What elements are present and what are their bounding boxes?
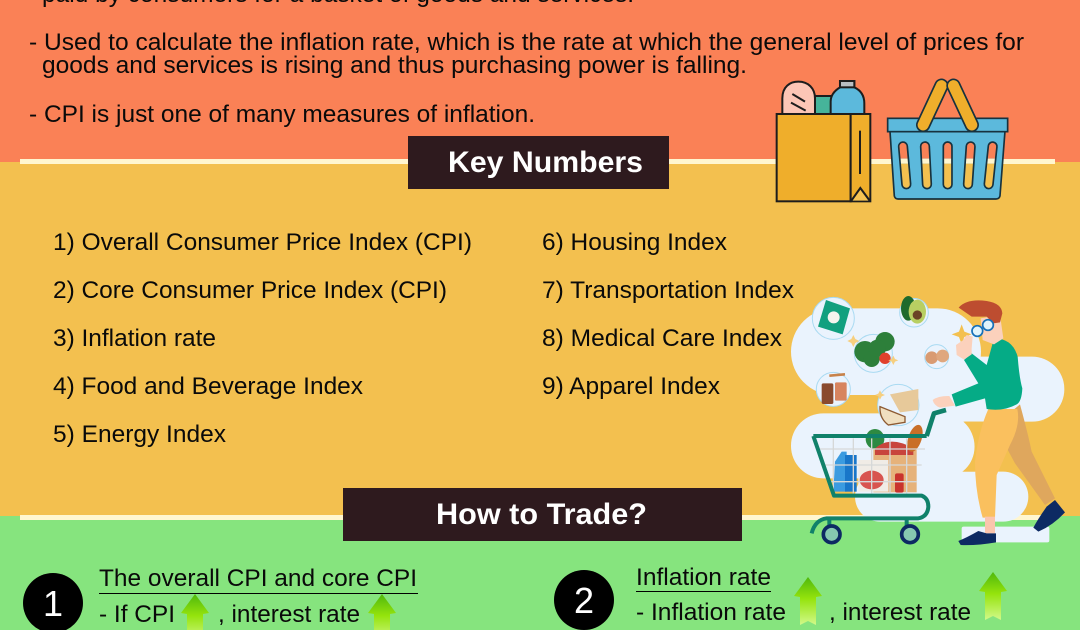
list: key numbers right column: 6) Housing Index <box>542 229 727 256</box>
step 2: inflation rate <box>554 564 1007 630</box>
arrow: interest rate up <box>368 594 396 630</box>
text: CPI rule: - If CPI <box>99 601 175 628</box>
icon: grocery bag <box>777 81 870 201</box>
text: definition bullets: - CPI is just one of many measures of inflation. <box>29 101 535 128</box>
list: key numbers left column: 3) Inflation rate <box>53 325 216 352</box>
heading: how to trade: How to Trade? <box>436 498 647 531</box>
arrow: inflation up <box>794 577 822 625</box>
text: CPI rule: , interest rate <box>218 601 360 628</box>
list: key numbers right column: 9) Apparel Index <box>542 373 720 400</box>
arrow: CPI up <box>181 594 209 630</box>
list: key numbers left column: 2) Core Consumer Price Index (CPI) <box>53 277 447 304</box>
list: key numbers left column: 1) Overall Consumer Price Index (CPI) <box>53 229 472 256</box>
list: key numbers left column <box>53 229 472 448</box>
text: definition bullets <box>29 0 1024 128</box>
cart contents <box>833 423 926 493</box>
arrow: interest rate up <box>979 572 1007 620</box>
icon: shopping basket <box>888 77 1008 199</box>
list: key numbers left column: 5) Energy Index <box>53 421 226 448</box>
list: key numbers right column: 8) Medical Care Index <box>542 325 782 352</box>
list: key numbers left column: 4) Food and Beverage Index <box>53 373 363 400</box>
cart wheels <box>823 526 918 543</box>
list: key numbers right column: 7) Transportation Index <box>542 277 794 304</box>
heading: inflation rate: Inflation rate <box>636 564 771 591</box>
badge: number 2: 2 <box>574 580 594 621</box>
badge: number 1: 1 <box>43 583 63 624</box>
text: definition bullets: - Used to calculate the inflation rate, which is the rate at which the general level of prices for <box>29 29 1024 56</box>
badge: number 2 <box>554 570 614 630</box>
text: CPI rule <box>99 601 360 628</box>
heading: key numbers: Key Numbers <box>448 146 643 179</box>
text: definition bullets: goods and services is rising and thus purchasing power is falling. <box>42 52 747 79</box>
heading: overall and core CPI: The overall CPI and core CPI <box>99 565 417 592</box>
shopper <box>933 300 1065 545</box>
list: key numbers right column <box>542 229 794 400</box>
text: inflation rule: - Inflation rate <box>636 599 786 626</box>
sparkles <box>847 324 972 400</box>
heading: key numbers <box>408 136 669 189</box>
food items <box>818 296 949 425</box>
badge: number 1 <box>23 573 83 630</box>
illustration: shopper with cart <box>791 296 1065 545</box>
text: inflation rule: , interest rate <box>829 599 971 626</box>
cart basket <box>812 410 946 533</box>
background clouds <box>791 308 1064 542</box>
food bubbles <box>812 297 949 426</box>
panel: key numbers <box>0 159 1080 516</box>
heading: how to trade <box>343 488 742 541</box>
panel: definition <box>0 0 1080 162</box>
text: inflation rule <box>636 599 971 626</box>
panel: how to trade <box>0 515 1080 630</box>
step 1: overall and core CPI <box>23 565 418 630</box>
